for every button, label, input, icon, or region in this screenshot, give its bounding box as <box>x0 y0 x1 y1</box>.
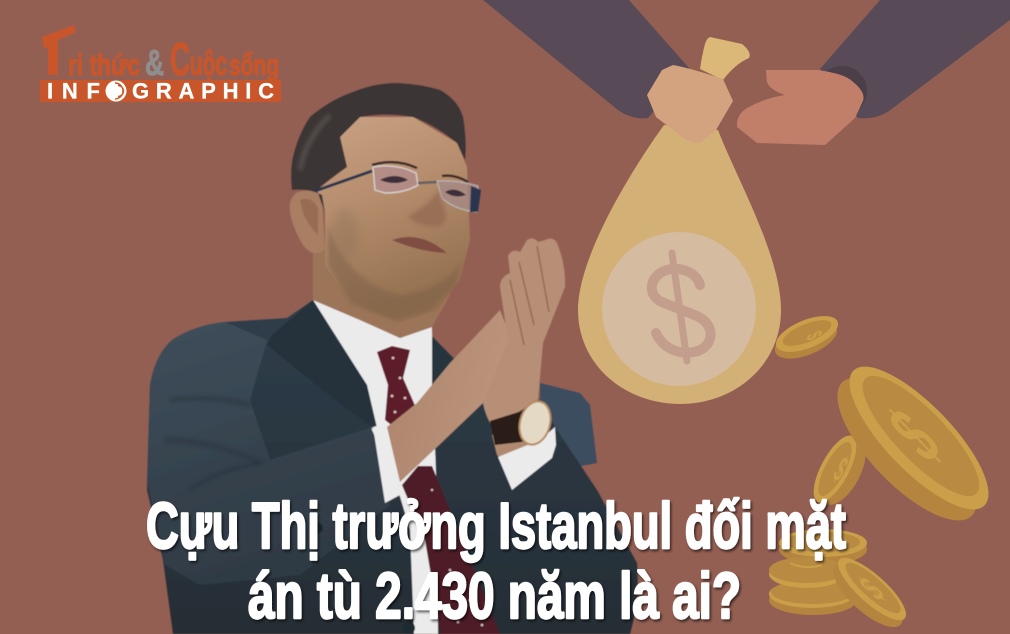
dollar sign <box>652 253 711 361</box>
illustration: hands holding money bag <box>483 0 1010 404</box>
logo wordmark: C <box>170 33 190 85</box>
wrist below watch <box>492 430 542 462</box>
front coin <box>824 549 914 634</box>
large coin: $ <box>872 392 957 479</box>
bag neck <box>700 37 750 80</box>
coin stack <box>769 529 867 615</box>
hair <box>291 83 466 213</box>
logo <box>40 25 281 104</box>
left hand <box>647 65 733 143</box>
logo infographic band: INF <box>47 78 100 104</box>
mouth <box>392 237 447 253</box>
title line 2: án tù 2.430 năm là ai? <box>248 559 741 632</box>
left cuff <box>373 423 400 503</box>
large coin <box>817 347 1008 541</box>
logo wordmark: sống <box>229 49 279 82</box>
logo wordmark: & <box>145 42 164 83</box>
left sleeve <box>147 322 390 585</box>
jacket body <box>147 300 638 634</box>
eyebrows <box>372 162 468 182</box>
small coin: $ <box>801 327 828 344</box>
arm crease shading <box>165 398 265 490</box>
glasses <box>315 166 481 212</box>
small coin <box>770 309 843 366</box>
neck <box>313 250 450 338</box>
hair highlight <box>300 115 330 170</box>
finger lines <box>510 246 549 345</box>
stubble <box>328 225 462 320</box>
logo infographic band: GRAPHIC <box>132 78 274 104</box>
right sleeve <box>820 0 1010 118</box>
nose <box>408 190 446 226</box>
right cuff <box>498 427 556 490</box>
logo infographic band <box>40 78 281 104</box>
tilted small coin: $ <box>828 449 854 489</box>
dollar circle <box>602 232 756 386</box>
logo wordmark <box>42 25 279 85</box>
tilted small coin <box>805 430 875 512</box>
right hand <box>737 70 864 145</box>
right hand <box>483 238 565 428</box>
left forearm and hand <box>387 310 510 482</box>
tie <box>377 346 500 634</box>
photo: man applauding <box>147 83 638 634</box>
face <box>317 117 470 322</box>
left lapel <box>267 300 378 432</box>
watch <box>490 398 555 448</box>
money bag <box>578 125 781 404</box>
logo wordmark: ri thức <box>68 49 140 82</box>
title <box>146 489 846 632</box>
back shoulder <box>540 383 597 470</box>
front coin: $ <box>851 569 892 608</box>
logo wordmark: uộc <box>190 45 227 83</box>
ear <box>290 191 325 253</box>
right lapel <box>432 337 462 395</box>
sleeve shadow <box>817 66 867 116</box>
shirt <box>313 300 438 634</box>
left sleeve <box>483 0 689 118</box>
buttons <box>313 523 323 533</box>
falling coins <box>769 309 1008 634</box>
